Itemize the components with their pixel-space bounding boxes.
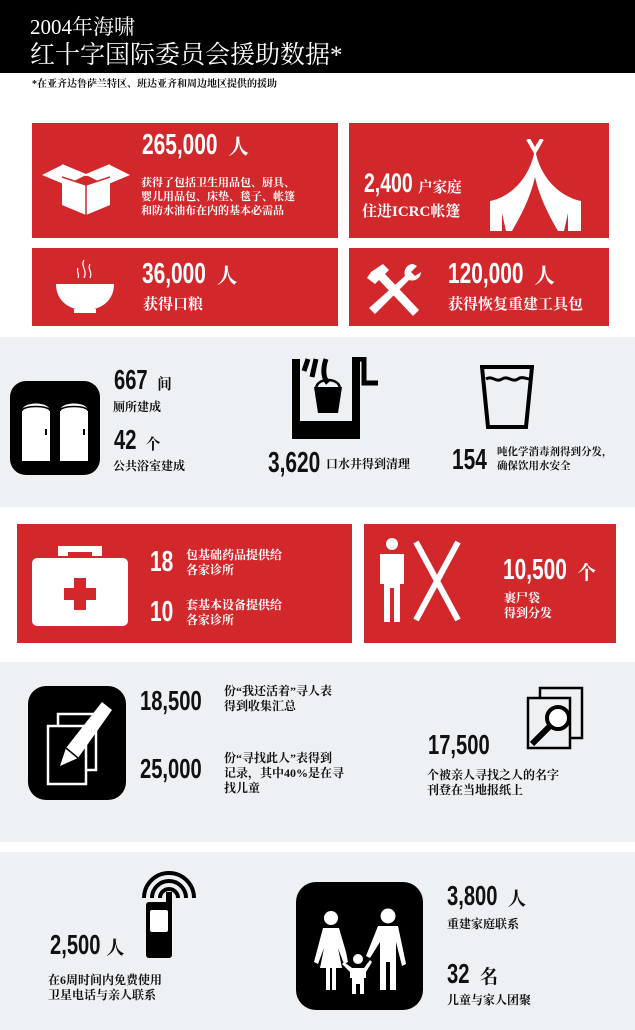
icon: toilets [10,381,100,475]
stat: 3,800 [447,880,526,911]
panel: tools [349,248,609,326]
text: I'm alive forms: 份“我还活着”寻人表 [224,684,332,698]
text: items description [141,176,295,217]
stat: 265,000: 人 [228,131,249,161]
text: drug kits [186,548,282,577]
stat: 10 sets: 10 [150,596,173,628]
panel: tracing [0,662,635,842]
stat: 667 toilets [114,364,171,395]
text: names published: 刊登在当地报纸上 [427,783,523,797]
stat: 32 [447,958,498,989]
text: children reunited: 儿童与家人团聚 [447,993,531,1007]
text: satellite calls: 在6周时间内免费使用 [48,973,162,987]
icon: glass of water [480,365,534,429]
panel: tents [349,123,609,238]
text: equipment: 套基本设备提供给 [186,598,282,612]
stat: 2,400 [364,168,462,198]
stat: 3,800: 人 [508,884,526,911]
subtitle: *在亚齐达鲁萨兰特区、班达亚齐和周边地区提供的援助 [32,79,277,90]
stat: 3,620 wells: 3,620 [268,447,320,479]
stat: 42 bathrooms: 个 [146,433,160,454]
panel: water and sanitation [0,337,635,507]
icon: tent [490,139,581,231]
panel: medical [17,524,352,643]
text: equipment [186,598,282,627]
title: 红十字国际委员会援助数据* [30,42,343,69]
text: search forms: 找儿童 [224,781,260,795]
text: tents: 住进ICRC帐篷 [362,204,460,220]
icon: well [292,357,378,439]
text: search forms: 份“寻找此人”表得到 [224,751,332,765]
stat: 2,400: 户家庭 [418,176,462,197]
icon: tools [367,264,421,316]
icon: family [296,882,423,1010]
text: tools: 获得恢复重建工具包 [448,297,583,313]
stat: 10,500: 个 [577,558,596,585]
text: search forms [224,751,344,795]
text: search forms: 记录，其中40%是在寻 [224,766,344,780]
stat: 17,500: 17,500 [428,729,490,760]
stat: 2,500 [50,929,125,960]
text: items description: 婴儿用品包、床垫、毯子、帐篷 [141,191,295,203]
stat: 2,400: 2,400 [364,168,413,198]
text: I'm alive forms [224,684,332,713]
header bar [0,0,635,73]
stat: 265,000: 265,000 [142,129,217,161]
text: items description: 获得了包括卫生用品包、厨具、 [141,177,295,189]
stat: 2,500: 2,500 [50,929,100,960]
stat: 42 bathrooms: 42 [114,424,136,455]
text: satellite calls [48,973,162,1002]
icon: medkit [32,546,128,626]
stat: 120,000: 120,000 [448,258,523,290]
stat: 32: 名 [480,962,498,989]
text: body bags: 得到分发 [504,606,552,620]
icon: box [42,164,130,215]
panel: reunification [0,852,635,1030]
stat: 154 tons: 154 [452,444,487,476]
stat: 25,000: 25,000 [140,753,202,784]
text: names published: 个被亲人寻找之人的名字 [427,768,559,782]
stat: 32: 32 [447,958,469,989]
stat: 36,000: 人 [217,260,237,290]
stat: 36,000: 36,000 [142,258,206,290]
stat: 3,800: 3,800 [447,880,497,911]
text: bathrooms: 公共浴室建成 [113,459,185,473]
text: equipment: 各家诊所 [186,613,234,627]
stat: 10,500: 10,500 [503,554,567,586]
stat: 2,500: 人 [106,933,125,960]
panel: relief items [32,123,338,238]
text: toilets: 厕所建成 [113,400,161,414]
stat: 18 kits: 18 [150,546,173,578]
text: disinfectant [497,446,612,472]
text: drug kits: 包基础药品提供给 [186,548,282,562]
icon: notepad [28,686,126,800]
text: I'm alive forms: 得到收集汇总 [224,699,296,713]
panel: food [32,248,338,326]
text: disinfectant: 确保饮用水安全 [497,461,570,472]
stat: 120,000: 人 [534,260,555,290]
stat: 18,500: 18,500 [140,685,202,716]
icon: satellite phone [142,871,196,958]
text: family links: 重建家庭联系 [447,917,519,931]
text: drug kits: 各家诊所 [186,563,234,577]
icon: search [526,686,584,750]
stat: 36,000 [142,258,237,290]
icon: bowl [56,260,114,313]
text: names published [427,768,559,797]
icon: man and X [380,538,461,622]
stat: 10,500 [503,554,596,586]
panel: body bags [364,524,616,643]
title [30,15,343,69]
text: wells: 口水井得到清理 [326,457,410,471]
text: body bags: 裹尸袋 [504,591,540,605]
text: body bags [504,591,552,620]
stat: 667 toilets: 间 [157,373,171,394]
text: satellite calls: 卫星电话与亲人联系 [48,988,156,1002]
text: disinfectant: 吨化学消毒剂得到分发， [497,447,612,458]
text: items description: 和防水油布在内的基本必需品 [141,205,284,217]
title: 2004年海啸 [30,15,135,39]
stat: 42 bathrooms [114,424,160,455]
text: food: 获得口粮 [143,297,203,313]
stat: 667 toilets: 667 [114,364,148,395]
